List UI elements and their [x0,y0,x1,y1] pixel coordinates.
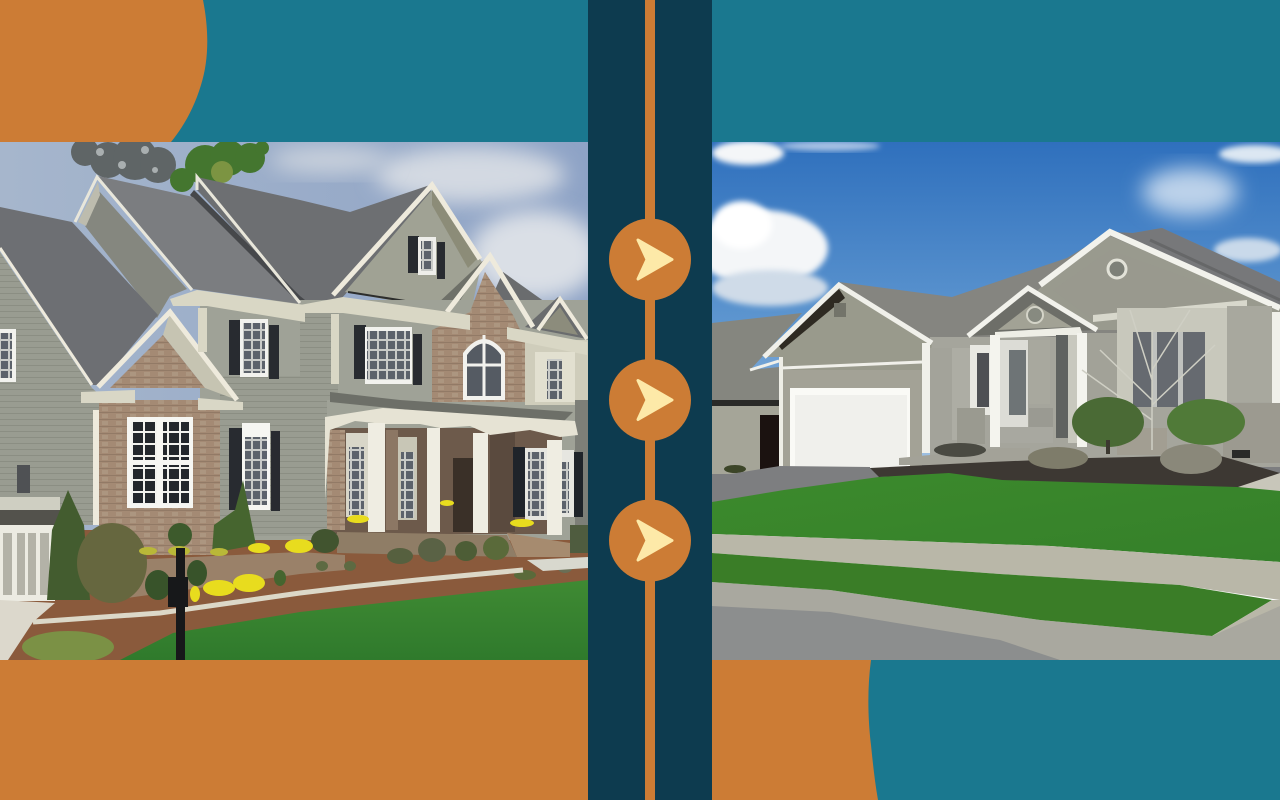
front porch [325,392,583,535]
second-floor and first-floor walls [200,272,588,540]
retaining wall [127,552,345,598]
upper windows and shutters [0,236,575,402]
entry door and panels [1000,335,1077,443]
top right teal banner [712,0,1280,142]
large bay window [1087,300,1247,430]
garage door [790,388,910,468]
bottom left orange banner [0,660,588,800]
arrow button 2 [609,359,691,441]
arrow button 3 [609,500,691,582]
curb and street [712,582,1280,660]
yellow flowers [139,500,534,602]
top left orange shape [0,0,207,142]
big gable trim [1040,232,1280,308]
white edging [33,570,523,622]
left siding wall [0,248,100,525]
top left teal banner [0,0,588,142]
foundation and steps [337,525,588,557]
mailbox [168,548,188,660]
middle roof and dormer side wall [75,176,300,318]
upper lawn [712,473,1280,562]
porch beam [995,327,1083,338]
photo: large two-storey house [0,142,588,660]
photo: single-storey house [712,142,1280,660]
left roof [0,207,158,385]
main eaves [170,290,587,384]
bare tree branches [1082,310,1215,450]
garage gable wall [750,285,932,467]
main roofs [839,228,1280,345]
porch columns [990,333,1087,447]
front lawn [120,580,588,660]
shrubs and evergreen trees [47,480,573,603]
right wall and stone base [1117,306,1280,463]
brick bay [81,312,243,555]
garage post [922,343,930,453]
bottom right teal banner [712,660,1280,800]
blue sky and clouds [696,141,1280,482]
right sidewalk strip [1212,600,1280,636]
garage wing wall [712,400,780,474]
mossy ground cover [22,631,114,663]
center divider band [588,0,712,800]
trees behind the roof [71,136,269,192]
wall background [930,236,1280,467]
entry walls [930,345,992,444]
entry gable trim [968,288,1097,336]
driveway [712,466,870,502]
shrubs [1072,397,1245,454]
sky [0,142,600,660]
upper roofs and gable [190,177,545,320]
lower windows [127,417,280,511]
mulch bed [870,455,1280,490]
ground base [0,530,588,660]
light driveway corner [1238,473,1280,491]
exterior lamp [17,465,30,493]
big gable siding and entry gable [968,250,1247,336]
bottom right orange shape [712,660,878,800]
garage, fence and gravel [0,497,60,660]
arrow button 1 [609,218,691,300]
ground fill behind the house [712,462,1280,502]
lower lawn [712,553,1272,636]
garage wing roof [712,313,802,400]
porch deck [899,448,1030,465]
small gable roofs and trim [447,256,587,339]
white path [527,557,588,571]
landscape rocks [934,443,1222,474]
sidewalk [712,534,1280,600]
